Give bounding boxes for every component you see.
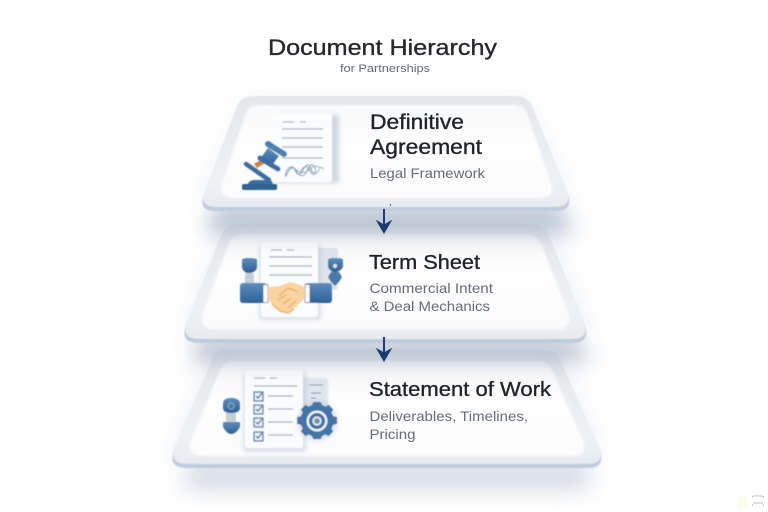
tier 3 panel: statement of work xyxy=(168,345,605,490)
tier 2 slab xyxy=(185,224,586,339)
tier 2 face xyxy=(202,234,569,329)
tier 2 rim xyxy=(185,226,586,343)
title xyxy=(268,35,497,75)
tier 2 description: Commercial Intent xyxy=(370,280,493,296)
tier 1 face xyxy=(221,105,552,198)
tier 3 slab xyxy=(173,350,601,464)
icon: gavel and signed document xyxy=(242,113,339,190)
tier 3 description: Deliverables, Timelines, xyxy=(370,408,528,424)
tier 2 panel: term sheet xyxy=(180,220,592,362)
tier 1 panel: definitive agreement xyxy=(195,96,575,234)
icon: handshake over document xyxy=(240,242,343,320)
title: Document Hierarchy xyxy=(268,35,497,60)
tier 1 heading xyxy=(370,111,482,159)
tier 3 description: Pricing xyxy=(370,426,416,442)
arrow: tier 1 to tier 2 xyxy=(377,204,391,233)
tier 3 face xyxy=(190,361,584,456)
tier 2 description xyxy=(370,280,493,314)
tier 3 description xyxy=(370,408,528,442)
tier 2 description: & Deal Mechanics xyxy=(370,298,490,314)
tier 3 heading: Statement of Work xyxy=(369,378,552,401)
arrow: tier 2 to tier 3 xyxy=(377,337,391,361)
tier 1 slab xyxy=(203,96,568,207)
tier 2 heading: Term Sheet xyxy=(369,251,480,274)
tier 1 heading: Definitive xyxy=(370,111,464,134)
watermark mark xyxy=(738,496,764,510)
icon: checklist and gear xyxy=(223,370,337,452)
tier 3 rim xyxy=(173,352,601,468)
title: for Partnerships xyxy=(340,63,431,75)
tier 1 heading: Agreement xyxy=(370,136,482,159)
tier 1 rim xyxy=(202,98,569,211)
tier 1 description: Legal Framework xyxy=(370,165,486,181)
